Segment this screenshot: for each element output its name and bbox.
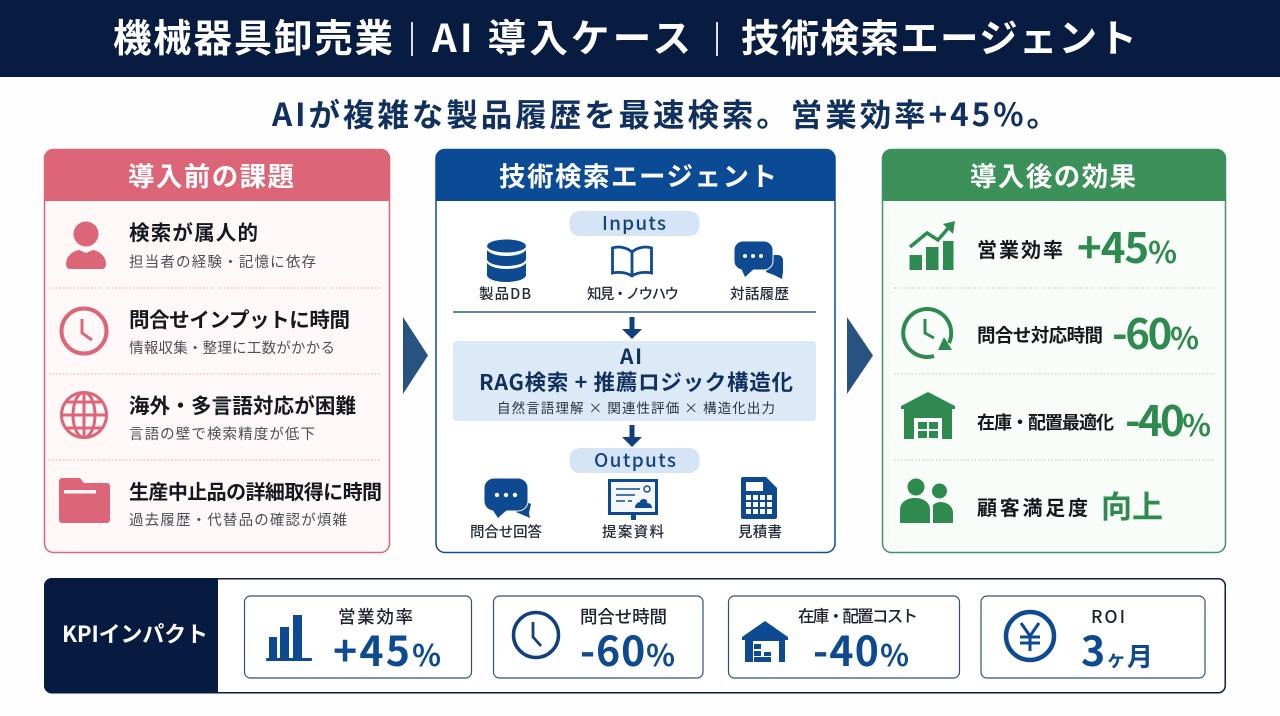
label: inquiry answer: 問合せ回答 (470, 521, 542, 542)
AI process box: RAG検索 + 推薦ロジック構造化 (479, 366, 793, 397)
outputs pill: Outputs (594, 446, 676, 473)
KPI card: inquiry time (494, 596, 703, 678)
icon: globe (62, 392, 106, 438)
heading: after: 導入後の効果 (970, 155, 1136, 194)
panel: KPI impact (44, 578, 1225, 693)
arrow: inputs to AI (622, 317, 642, 339)
arrow: AI to outputs (622, 425, 642, 447)
label: product DB: 製品DB (479, 283, 531, 304)
row: inventory (977, 388, 1211, 449)
row: sales efficiency: +45% (1077, 215, 1177, 276)
icon: proposal slide (610, 480, 656, 520)
AI process box: AI (619, 341, 642, 371)
panel: agent (436, 149, 835, 552)
KPI card: inventory cost: 在庫・配置コスト (798, 603, 918, 627)
text: item 1: 検索が属人的 (129, 216, 258, 246)
icon: estimate sheet (741, 477, 777, 519)
KPI card: ROI: 3ヶ月 (1081, 618, 1153, 678)
row: satisfaction: 向上 (1101, 482, 1163, 527)
arrow: agent to after (847, 317, 873, 394)
title (113, 8, 1137, 64)
label: knowhow: 知見・ノウハウ (587, 283, 679, 304)
row: response time: -60% (1112, 301, 1199, 362)
title: 技術検索エージェント (741, 8, 1137, 64)
icon: book (612, 247, 652, 276)
AI process box (453, 341, 816, 421)
icon: folder (59, 478, 110, 523)
panel: before challenges (44, 149, 390, 552)
text: item 2 (129, 303, 350, 358)
row: sales efficiency: 営業効率 (977, 234, 1063, 263)
text: item 4: 過去履歴・代替品の確認が煩雑 (129, 509, 347, 530)
subtitle: AIが複雑な製品履歴を最速検索。営業効率+45%。 (271, 90, 1058, 136)
title: AI 導入ケース (431, 8, 691, 64)
row: inventory: -40% (1125, 388, 1211, 449)
header band (0, 0, 1280, 77)
icon: clock with arrow (903, 309, 952, 357)
text: item 3 (129, 389, 356, 444)
icon: warehouse (901, 392, 955, 439)
heading: agent: 技術検索エージェント (499, 155, 777, 194)
heading: before: 導入前の課題 (128, 155, 294, 194)
KPI label: KPIインパクト (62, 617, 208, 649)
row: response time: 問合せ対応時間 (977, 322, 1103, 348)
arrow: before to agent (403, 317, 428, 394)
icon: person (66, 222, 106, 269)
text: item 2: 情報収集・整理に工数がかかる (129, 337, 335, 358)
icon: answer chat (484, 478, 531, 518)
row: sales efficiency (977, 215, 1177, 276)
icon: database (487, 240, 526, 282)
text: item 2: 問合せインプットに時間 (129, 303, 350, 333)
label: estimate: 見積書 (738, 521, 782, 542)
text: item 3: 海外・多言語対応が困難 (129, 389, 356, 419)
inputs pill: Inputs (602, 209, 666, 236)
label: proposal: 提案資料 (602, 521, 664, 542)
icon: clock (62, 308, 106, 354)
title: 機械器具卸売業 (113, 8, 393, 64)
icon: chat (734, 241, 783, 279)
text: item 3: 言語の壁で検索精度が低下 (129, 423, 315, 444)
text: item 1: 担当者の経験・記憶に依存 (129, 251, 316, 272)
KPI card: inquiry time: 問合せ時間 (580, 604, 667, 629)
AI process box: 自然言語理解 × 関連性評価 × 構造化出力 (497, 397, 775, 417)
KPI card: inquiry time: -60% (580, 618, 675, 678)
KPI card: inventory cost: -40% (813, 618, 909, 678)
icon: customers (900, 478, 953, 523)
KPI card: ROI (981, 596, 1205, 678)
KPI card: inventory cost (728, 596, 960, 678)
row: satisfaction (977, 482, 1163, 527)
row: response time (977, 301, 1199, 362)
text: item 4 (129, 476, 382, 530)
panel: after effects (882, 149, 1226, 552)
text: item 4: 生産中止品の詳細取得に時間 (129, 476, 382, 505)
row: satisfaction: 顧客満足度 (977, 492, 1088, 521)
KPI card: sales (244, 596, 472, 678)
KPI card: sales: +45% (333, 618, 441, 678)
KPI card: sales: 営業効率 (338, 604, 413, 629)
label: chat history: 対話履歴 (730, 283, 789, 304)
outputs pill (570, 446, 700, 473)
icon: growth chart (910, 221, 955, 270)
text: item 1 (129, 216, 316, 272)
KPI card: ROI: ROI (1091, 604, 1125, 629)
row: inventory: 在庫・配置最適化 (977, 409, 1114, 435)
inputs pill (570, 209, 700, 236)
